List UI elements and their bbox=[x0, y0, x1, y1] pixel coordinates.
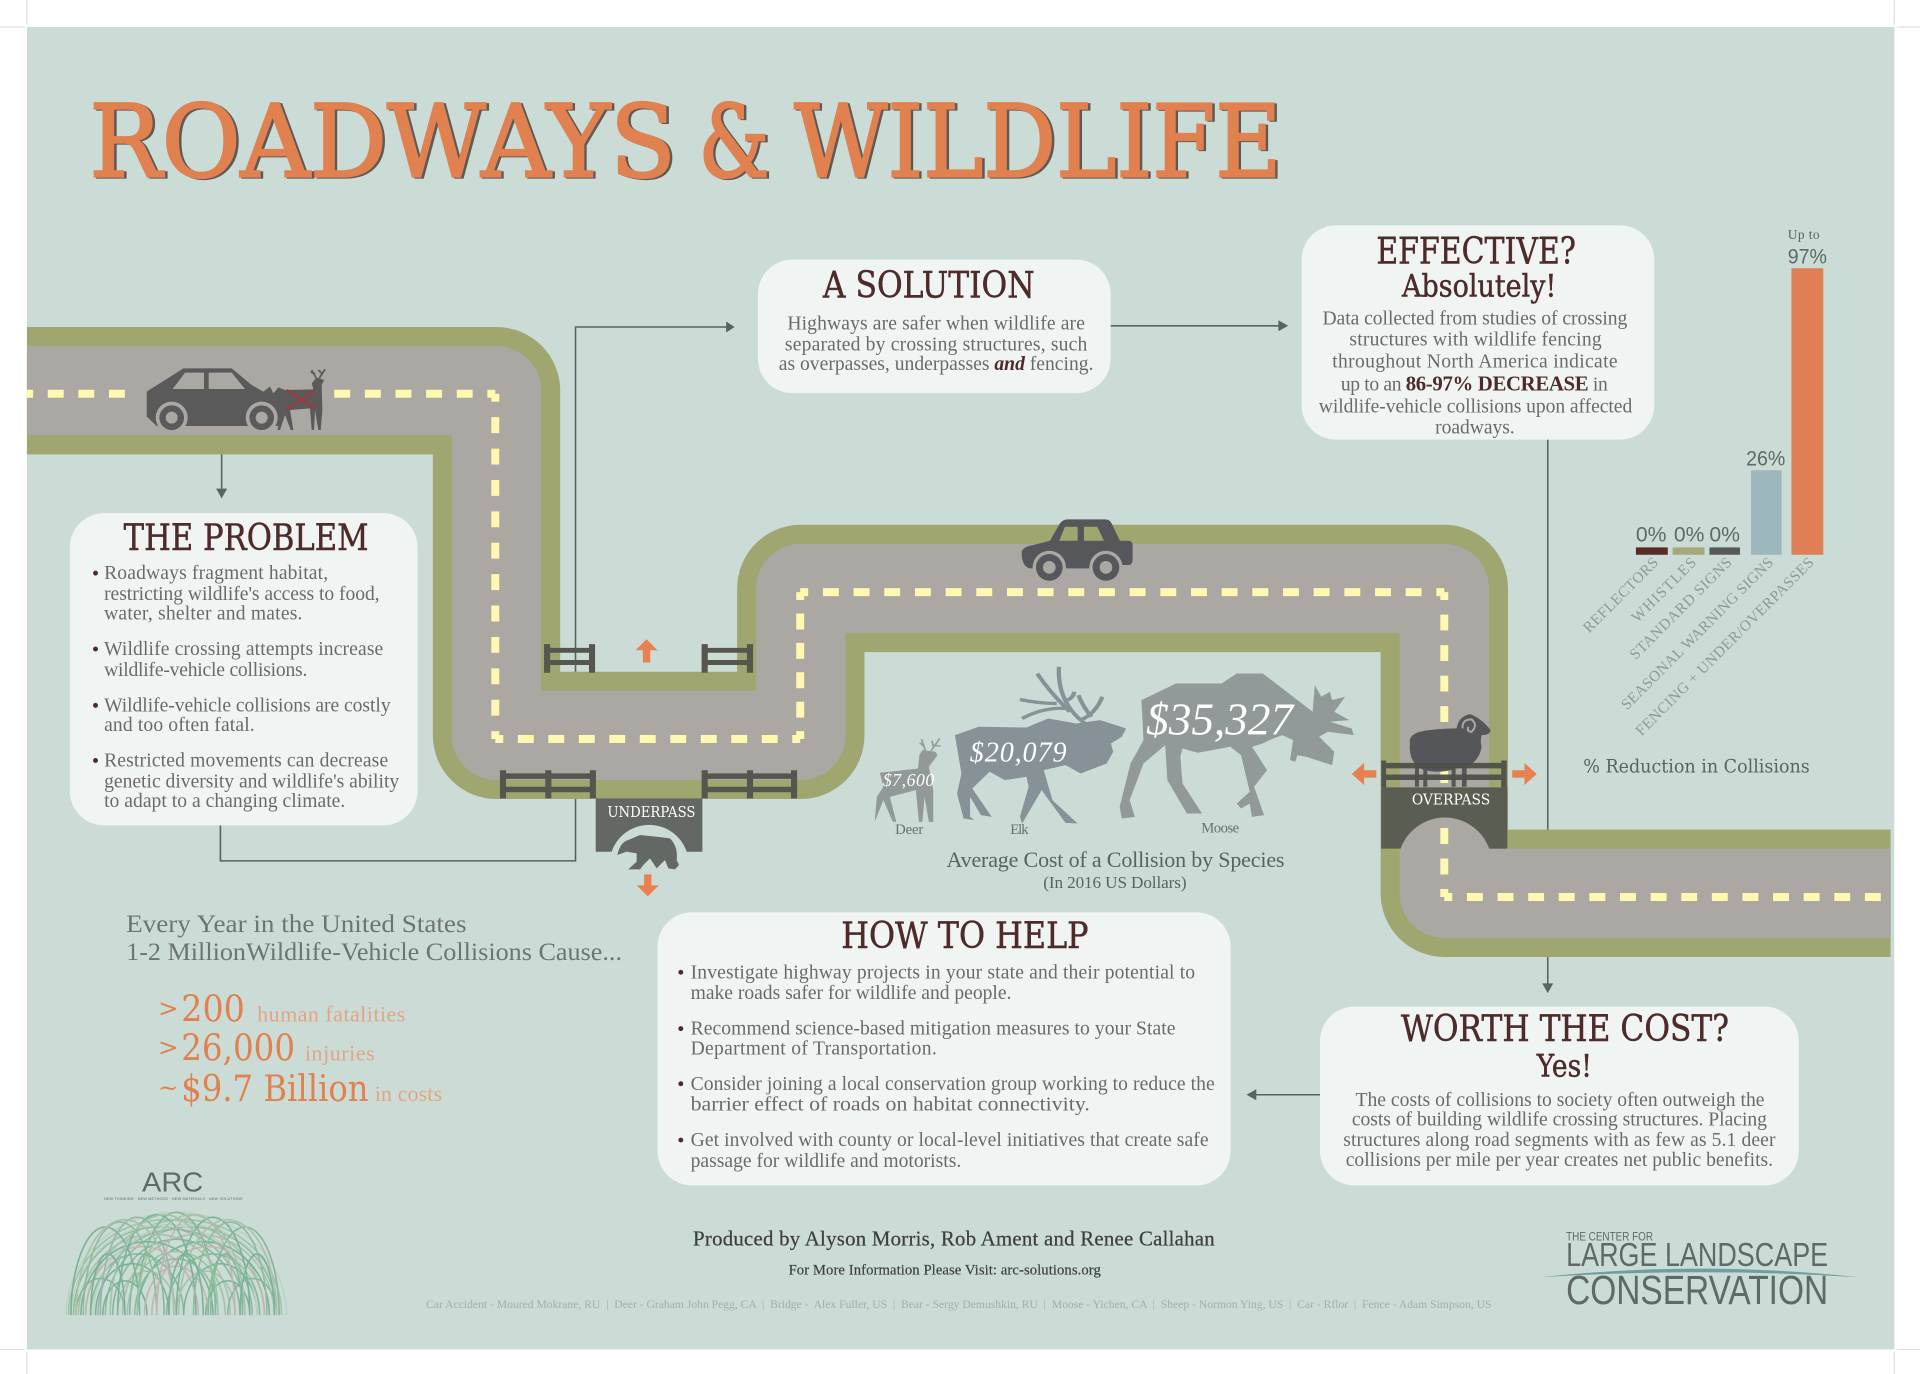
heading: how to help: HOW TO HELP bbox=[841, 914, 1089, 957]
connector: problem arrow bbox=[216, 454, 227, 498]
stats: ~ bbox=[158, 1073, 178, 1102]
panel: worth the cost bbox=[1320, 1007, 1799, 1185]
logo: center for large landscape conservation bbox=[1540, 1229, 1859, 1313]
stats: injuries bbox=[305, 1040, 375, 1065]
text: worth the cost body: structures along road segments with as few as 5.1 deer bbox=[1343, 1130, 1776, 1151]
text: how to help bullets: passage for wildlife and motorists. bbox=[691, 1151, 961, 1172]
heading: effective: EFFECTIVE? bbox=[1376, 229, 1576, 272]
stats bbox=[158, 987, 442, 1110]
title: ROADWAYS bbox=[89, 83, 676, 200]
road bbox=[27, 391, 1891, 897]
text: how to help bullets: Get involved with county or local-level initiatives that create safe bbox=[691, 1130, 1209, 1151]
logo: ARC: NEW THINKING · NEW METHODS · NEW MATERIALS · NEW SOLUTIONS bbox=[104, 1197, 243, 1201]
connector: worth the cost to how to help bbox=[1247, 1089, 1320, 1100]
title: WILDLIFE bbox=[797, 85, 1284, 202]
text: a solution body: separated by crossing structures, such bbox=[785, 334, 1088, 355]
connector: effective to worth the cost bbox=[1542, 440, 1553, 993]
text: a solution body: as overpasses, underpasses and fencing. bbox=[779, 354, 1093, 375]
logo: ARC: ARC bbox=[142, 1166, 203, 1197]
bar chart: percent reduction: Up to bbox=[1788, 227, 1820, 242]
credit: more information: For More Information Please Visit: arc-solutions.org bbox=[789, 1263, 1101, 1279]
stats: $9.7 Billion bbox=[181, 1067, 369, 1110]
icon: deer with cost bbox=[875, 738, 941, 822]
bar chart: percent reduction: 0% bbox=[1709, 523, 1740, 546]
text: problem bullets: Wildlife crossing attempts increase bbox=[104, 639, 384, 660]
text: how to help bullets: Recommend science-based mitigation measures to your State bbox=[691, 1019, 1176, 1040]
icon: elk with cost bbox=[955, 667, 1126, 823]
text: how to help bullets: Consider joining a local conservation group working to reduce the bbox=[691, 1074, 1215, 1095]
caption: species labels bbox=[895, 821, 1240, 838]
text: problem bullets: water, shelter and mates. bbox=[104, 604, 302, 625]
text: a solution body bbox=[779, 313, 1093, 375]
text: every year: Every Year in the United States bbox=[126, 909, 467, 938]
arrow: left bbox=[1352, 763, 1376, 785]
icon: moose with cost: $35,327 bbox=[1146, 695, 1295, 745]
text: problem bullets: Roadways fragment habitat, bbox=[104, 563, 328, 584]
logo: center for large landscape conservation: LARGE LANDSCAPE bbox=[1566, 1237, 1828, 1274]
icon: car colliding with deer bbox=[147, 368, 325, 434]
bar chart: percent reduction: 0% bbox=[1636, 523, 1667, 546]
text: every year bbox=[126, 909, 622, 966]
text: effective body: up to an 86-97% DECREASE in bbox=[1341, 372, 1608, 396]
title: WILDLIFE bbox=[794, 83, 1281, 200]
bar chart: percent reduction: SEASONAL WARNING SIGNS bbox=[1618, 554, 1777, 713]
panel: how to help bbox=[658, 912, 1231, 1185]
text: a solution body: Highways are safer when wildlife are bbox=[787, 313, 1085, 334]
overpass bbox=[1381, 760, 1507, 849]
text: worth the cost body bbox=[1343, 1090, 1776, 1171]
text: problem bullets: wildlife-vehicle collisions. bbox=[104, 660, 307, 681]
text: problem bullets: Wildlife-vehicle collisions are costly bbox=[104, 695, 391, 716]
text: effective body: throughout North America indicate bbox=[1332, 351, 1618, 372]
logo: center for large landscape conservation: THE CENTER FOR bbox=[1566, 1229, 1653, 1243]
fence: upper right bbox=[702, 644, 753, 673]
text: how to help bullets: make roads safer for wildlife and people. bbox=[691, 983, 1011, 1004]
text: how to help bullets: barrier effect of roads on habitat connectivity. bbox=[691, 1095, 1090, 1116]
heading: average cost: Average Cost of a Collision by Species bbox=[947, 847, 1284, 872]
stats: 26,000 bbox=[181, 1026, 295, 1069]
bar chart: percent reduction: 26% bbox=[1746, 447, 1785, 470]
bar chart: percent reduction bbox=[1580, 227, 1827, 739]
logo: center for large landscape conservation: CONSERVATION bbox=[1566, 1267, 1828, 1313]
caption: species labels: Deer bbox=[895, 822, 923, 838]
heading: worth the cost: WORTH THE COST? bbox=[1401, 1007, 1729, 1050]
title: & bbox=[701, 85, 772, 202]
fence: lower left bbox=[500, 770, 596, 798]
bar chart: percent reduction: STANDARD SIGNS bbox=[1626, 554, 1735, 663]
text: worth the cost body: The costs of collisions to society often outweigh the bbox=[1356, 1090, 1765, 1111]
stats: > bbox=[158, 993, 178, 1022]
icon: elk with cost: $20,079 bbox=[970, 738, 1067, 769]
arrow: up bbox=[636, 639, 658, 663]
fence: upper left bbox=[544, 644, 595, 673]
subheading: yes: Yes! bbox=[1536, 1049, 1592, 1084]
text: how to help bullets bbox=[678, 962, 1215, 1172]
icon: deer with cost: $7,600 bbox=[883, 770, 934, 790]
stats: human fatalities bbox=[257, 1001, 405, 1026]
text: effective body: Data collected from studies of crossing bbox=[1322, 309, 1628, 330]
title: & bbox=[699, 83, 770, 200]
underpass: UNDERPASS bbox=[607, 804, 696, 821]
text: problem bullets: Restricted movements can decrease bbox=[104, 751, 388, 772]
icon: bear bbox=[617, 835, 679, 869]
text: every year: 1-2 MillionWildlife-Vehicle Collisions Cause... bbox=[126, 937, 622, 966]
caption: species labels: Elk bbox=[1010, 822, 1029, 838]
chart caption: % Reduction in Collisions bbox=[1583, 757, 1810, 778]
stats: 200 bbox=[181, 987, 245, 1030]
title bbox=[89, 83, 1284, 202]
text: worth the cost body: costs of building wildlife crossing structures. Placing bbox=[1352, 1109, 1767, 1130]
logo: ARC bbox=[66, 1166, 287, 1315]
bar chart: percent reduction: 97% bbox=[1788, 245, 1827, 268]
text: effective body: wildlife-vehicle collisions upon affected bbox=[1319, 397, 1632, 418]
connector: solution to effective bbox=[1111, 320, 1288, 331]
panel: effective bbox=[1302, 225, 1654, 440]
text: how to help bullets: Investigate highway projects in your state and their potential to bbox=[691, 962, 1195, 983]
text: effective body bbox=[1319, 309, 1632, 439]
caption: 2016 dollars: (In 2016 US Dollars) bbox=[1043, 873, 1187, 892]
text: worth the cost body: collisions per mile per year creates net public benefits. bbox=[1346, 1150, 1773, 1171]
overpass: OVERPASS bbox=[1412, 792, 1490, 809]
title: ROADWAYS bbox=[92, 85, 678, 202]
arrow: right bbox=[1512, 763, 1537, 785]
underpass bbox=[596, 798, 702, 852]
panel: the problem bbox=[70, 513, 418, 825]
text: effective body: roadways. bbox=[1435, 418, 1515, 439]
bar chart: percent reduction: REFLECTORS bbox=[1580, 554, 1662, 636]
text: problem bullets: genetic diversity and wildlife's ability bbox=[104, 771, 399, 792]
text: problem bullets: to adapt to a changing climate. bbox=[104, 791, 345, 812]
bar chart: percent reduction: FENCING + UNDER/OVERPASSES bbox=[1632, 554, 1818, 739]
icon: car on road bbox=[1022, 519, 1133, 584]
text: problem bullets bbox=[93, 563, 399, 812]
arrow: down bbox=[637, 874, 659, 896]
text: how to help bullets: Department of Transportation. bbox=[691, 1038, 937, 1059]
heading: a solution: A SOLUTION bbox=[822, 264, 1035, 307]
subheading: absolutely: Absolutely! bbox=[1401, 269, 1556, 304]
credit: icon attributions: Car Accident - Moured Mokrane, RU | Deer - Graham John Pegg, CA | Bridge - Alex Fuller, US | Bear - Sergy Demushkin, RU | Moose - Yichen, CA | Sheep - Normon Ying, US | Car - Rflor | Fence - Adam Simpson, US bbox=[426, 1298, 1491, 1311]
bar chart: percent reduction: WHISTLES bbox=[1628, 554, 1700, 626]
text: problem bullets: and too often fatal. bbox=[104, 715, 255, 736]
connector: problem to solution bbox=[220, 321, 735, 861]
panel: a solution bbox=[758, 260, 1111, 393]
bar chart: percent reduction: 0% bbox=[1674, 523, 1704, 546]
icon: sheep on overpass bbox=[1410, 714, 1491, 787]
stats: > bbox=[158, 1033, 178, 1062]
credit: produced by: Produced by Alyson Morris, Rob Ament and Renee Callahan bbox=[693, 1226, 1215, 1250]
heading: the problem: THE PROBLEM bbox=[124, 516, 369, 559]
caption: species labels: Moose bbox=[1201, 821, 1240, 837]
fence: lower right bbox=[702, 770, 797, 798]
text: problem bullets: restricting wildlife's access to food, bbox=[104, 584, 380, 605]
text: effective body: structures with wildlife fencing bbox=[1349, 329, 1602, 350]
icon: moose with cost bbox=[1120, 673, 1354, 818]
stats: in costs bbox=[375, 1081, 442, 1106]
